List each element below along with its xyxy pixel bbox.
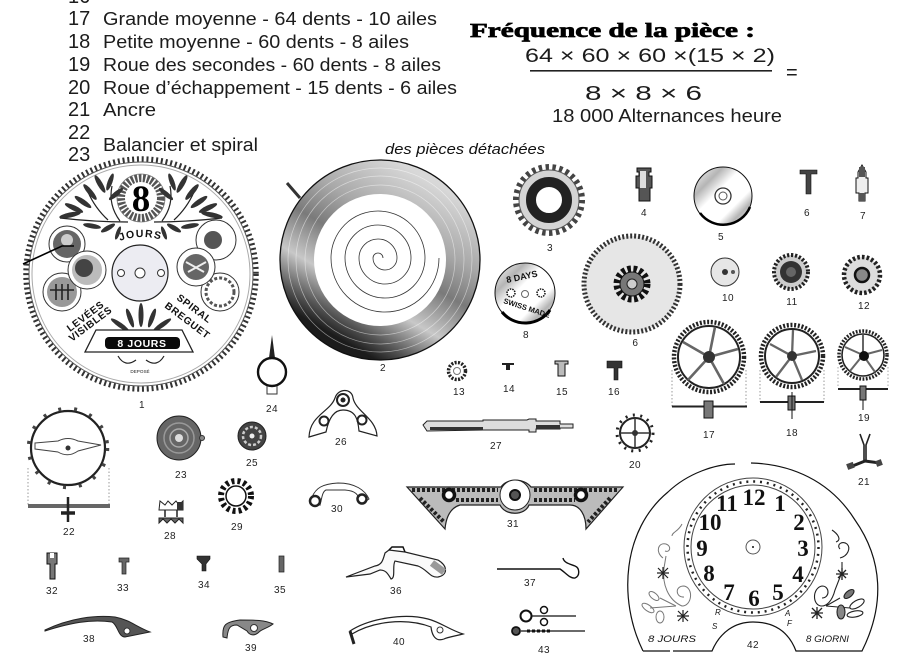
hour numerals: 8 xyxy=(703,561,715,586)
part 23: balance spring xyxy=(157,416,204,481)
part 36: lever xyxy=(346,547,446,597)
hour numerals: 7 xyxy=(723,580,735,605)
part 8: 8 days disc: 8 DAYS xyxy=(505,269,538,285)
part 35: screw xyxy=(274,556,286,596)
part 11: small wheel: 11 xyxy=(786,297,798,308)
part 31: engraved bridge xyxy=(407,480,623,530)
part 33: screw xyxy=(117,558,129,594)
part 35: screw: 35 xyxy=(274,585,286,596)
parts list: Grande moyenne - 64 dents - 10 ailes xyxy=(103,9,437,29)
part 22: balance wheel with side view xyxy=(28,408,110,538)
parts list: Ancre xyxy=(103,100,156,120)
part 8: 8 days disc: SWISS MADE xyxy=(502,296,551,320)
part 19: wheel with side view: 19 xyxy=(858,413,870,424)
part 24: pendant: 24 xyxy=(266,404,278,415)
part 2: mainspring xyxy=(280,160,480,374)
part 14: small screw xyxy=(502,363,515,395)
hour numerals: 2 xyxy=(793,510,805,535)
parts list: Roue d’échappement - 15 dents - 6 ailes xyxy=(103,78,457,98)
parts list: 19 xyxy=(68,54,90,76)
dial lettering: R xyxy=(715,608,721,617)
part 5: disc: 5 xyxy=(718,232,724,243)
parts list: 21 xyxy=(68,99,90,121)
frequency formula: 64 × 60 × 60 ×(15 × 2) xyxy=(525,45,775,67)
part 3: toothed wheel xyxy=(516,167,582,254)
section caption: des pièces détachées xyxy=(385,141,546,158)
part 29: pinion wheel: 29 xyxy=(231,522,243,533)
part 19: wheel with side view xyxy=(838,331,888,424)
hour numerals: 10 xyxy=(698,510,722,535)
part 10: small disc xyxy=(711,258,739,304)
part 32: screw xyxy=(46,553,58,597)
dial lettering xyxy=(648,608,849,645)
parts list xyxy=(68,0,457,166)
part 6: T screw: 6 xyxy=(804,208,810,219)
hour numerals: 3 xyxy=(797,536,809,561)
part 39: click: 39 xyxy=(245,643,257,654)
part 12: small wheel xyxy=(844,257,880,312)
wreath with numeral 8: 8 xyxy=(132,179,150,220)
part 17: wheel with side view xyxy=(672,322,747,441)
parts list: 20 xyxy=(68,77,90,99)
right floral ornament xyxy=(811,530,866,619)
part 4: screw xyxy=(636,168,652,219)
part 32: screw: 32 xyxy=(46,586,58,597)
part 20: escape wheel xyxy=(617,415,653,471)
part 1: decorated barrel dial xyxy=(22,156,259,411)
part 37: wire hook xyxy=(497,558,579,589)
part 9: large wheel with pinion xyxy=(584,236,680,347)
hour numerals: 11 xyxy=(716,491,738,516)
pointer line xyxy=(23,246,74,264)
hour numerals: 12 xyxy=(742,485,766,510)
LEVEES VISIBLES SPIRAL BREGUET: BREGUET xyxy=(162,301,212,342)
JOURS label: JOURS xyxy=(120,230,161,240)
part 39: click xyxy=(223,620,273,654)
banner 8 JOURS: 8 JOURS xyxy=(117,338,167,350)
LEVEES VISIBLES SPIRAL BREGUET: SPIRAL xyxy=(174,293,213,326)
part 16: screw xyxy=(607,361,622,398)
part 14: small screw: 14 xyxy=(503,384,515,395)
hour numerals: 1 xyxy=(774,491,786,516)
banner 8 JOURS xyxy=(85,330,193,374)
wreath with numeral 8 xyxy=(117,174,165,222)
part 42: clock dial: 42 xyxy=(747,640,759,651)
part 3: toothed wheel: 3 xyxy=(547,243,553,254)
frequency formula: Fréquence de la pièce : xyxy=(470,20,755,42)
frequency formula xyxy=(470,20,798,126)
dial lettering: F xyxy=(787,619,793,628)
part 4: screw: 4 xyxy=(641,208,647,219)
part 15: screw: 15 xyxy=(556,387,568,398)
part 16: screw: 16 xyxy=(608,387,620,398)
frequency formula: 8 × 8 × 6 xyxy=(585,83,702,105)
hour numerals: 6 xyxy=(748,586,760,611)
dial lettering: S xyxy=(712,622,718,631)
part 30: bridge: 30 xyxy=(331,504,343,515)
dial lettering: A xyxy=(784,609,790,618)
part 24: pendant xyxy=(258,335,286,415)
part 31: engraved bridge: 31 xyxy=(507,519,519,530)
part 21: anchor: 21 xyxy=(858,477,870,488)
part 7: jewel screw xyxy=(856,165,868,222)
part 40: spring: 40 xyxy=(393,637,405,648)
LEVEES VISIBLES SPIRAL BREGUET: LEVÉES xyxy=(64,298,107,334)
dial lettering: 8 JOURS xyxy=(648,634,697,645)
laurel branch right xyxy=(154,173,223,240)
part 21: anchor xyxy=(846,434,883,488)
part 10: small disc: 10 xyxy=(722,293,734,304)
part 28: ratchet pinion xyxy=(159,501,183,542)
part 5: disc xyxy=(694,167,752,243)
part 30: bridge xyxy=(310,483,369,515)
part 7: jewel screw: 7 xyxy=(860,211,866,222)
parts list: 23 xyxy=(68,144,90,166)
part 43: clock hands xyxy=(512,606,585,656)
parts list: Balancier et spiral xyxy=(103,135,258,155)
medals xyxy=(43,220,239,311)
LEVEES VISIBLES SPIRAL BREGUET xyxy=(64,293,213,344)
part 27: arbor: 27 xyxy=(490,441,502,452)
part 20: escape wheel: 20 xyxy=(629,460,641,471)
part 29: pinion wheel xyxy=(221,481,251,533)
part 13: pinion xyxy=(448,362,466,398)
part 18: wheel with side view xyxy=(760,325,824,439)
part 40: spring xyxy=(350,616,463,648)
parts list: 17 xyxy=(68,8,90,30)
part 1: decorated barrel dial: 1 xyxy=(139,400,145,411)
part 34: screw: 34 xyxy=(198,580,210,591)
part 23: balance spring: 23 xyxy=(175,470,187,481)
part 36: lever: 36 xyxy=(390,586,402,597)
part 9: large wheel with pinion: 9 xyxy=(632,336,638,347)
part 43: clock hands: 43 xyxy=(538,645,550,656)
parts list: 22 xyxy=(68,122,90,144)
LEVEES VISIBLES SPIRAL BREGUET: VISIBLES xyxy=(67,305,115,344)
part 22: balance wheel with side view: 22 xyxy=(63,527,75,538)
hour numerals: 5 xyxy=(772,580,784,605)
banner 8 JOURS: DEPOSÉ xyxy=(130,368,150,374)
part 25: patterned disc xyxy=(238,422,266,469)
part 8: 8 days disc xyxy=(495,263,555,341)
part 11: small wheel xyxy=(774,255,808,308)
part 33: screw: 33 xyxy=(117,583,129,594)
part 13: pinion: 13 xyxy=(453,387,465,398)
part 15: screw xyxy=(555,361,568,398)
parts list: Petite moyenne - 60 dents - 8 ailes xyxy=(103,32,409,52)
left floral ornament xyxy=(641,524,691,623)
parts list: Roue des secondes - 60 dents - 8 ailes xyxy=(103,55,441,75)
parts list: 18 xyxy=(68,31,90,53)
part 26: bridge: 26 xyxy=(335,437,347,448)
part 38: click spring xyxy=(45,616,150,645)
part 42: clock dial xyxy=(628,463,878,651)
part 38: click spring: 38 xyxy=(83,634,95,645)
hour numerals: 4 xyxy=(792,562,804,587)
frequency formula: 18 000 Alternances heure xyxy=(552,105,782,126)
part 6: T screw xyxy=(800,170,817,219)
laurel branch left xyxy=(59,173,128,240)
part 27: arbor xyxy=(423,419,573,452)
lower foliage xyxy=(110,303,172,333)
part 25: patterned disc: 25 xyxy=(246,458,258,469)
dial lettering: 8 GIORNI xyxy=(806,634,849,645)
part 26: bridge xyxy=(309,390,377,448)
part 18: wheel with side view: 18 xyxy=(786,428,798,439)
part 37: wire hook: 37 xyxy=(524,578,536,589)
hour numerals xyxy=(696,485,809,611)
part 12: small wheel: 12 xyxy=(858,301,870,312)
part 2: mainspring: 2 xyxy=(380,363,386,374)
part 8: 8 days disc: 8 xyxy=(523,330,529,341)
part 28: ratchet pinion: 28 xyxy=(164,531,176,542)
hour numerals: 9 xyxy=(696,536,708,561)
minute ring xyxy=(684,478,822,616)
centre plate xyxy=(112,245,168,301)
part 17: wheel with side view: 17 xyxy=(703,430,715,441)
frequency formula: = xyxy=(786,62,798,84)
part 34: screw xyxy=(197,556,210,591)
